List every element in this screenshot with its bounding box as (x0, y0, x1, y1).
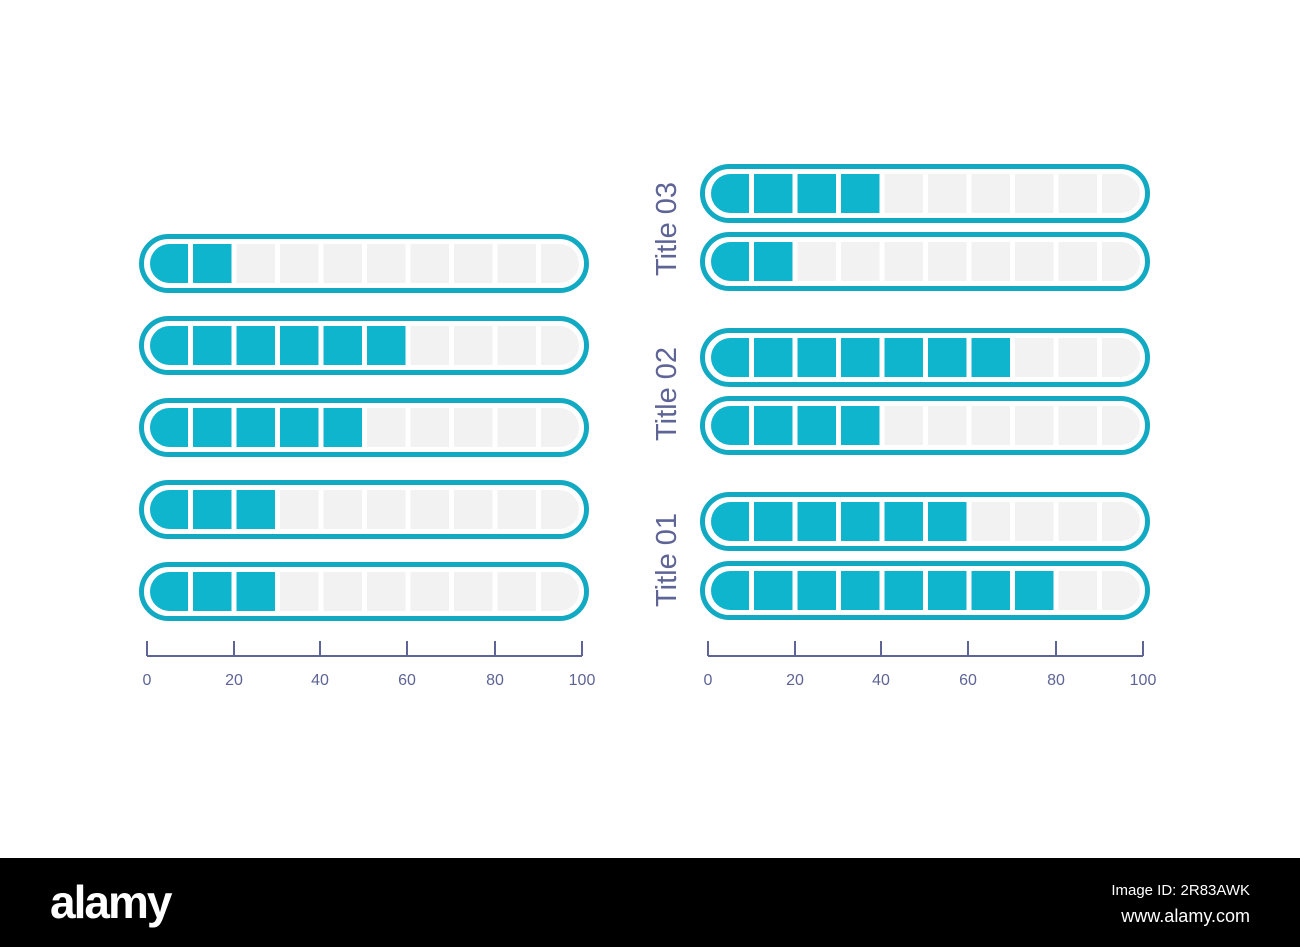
right bar chart (702, 166, 1148, 618)
left axis: 0 (143, 672, 152, 689)
bar L2: 60 (142, 318, 586, 372)
bar L1: 20 (142, 236, 586, 290)
right axis: 40 (872, 672, 890, 689)
left axis: 80 (486, 672, 504, 689)
label: Title 03: Title 03 (651, 182, 683, 276)
left axis: 60 (398, 672, 416, 689)
left axis: 20 (225, 672, 243, 689)
logo: alamy: alamy (50, 876, 173, 928)
bar R3: 70 (702, 330, 1148, 384)
bar R2: 20 (702, 234, 1148, 288)
website: www.alamy.com (1120, 906, 1250, 926)
bar L4: 30 (142, 482, 586, 536)
left axis: 100 (569, 672, 595, 689)
bar R6: 80 (702, 564, 1148, 618)
left axis (143, 641, 595, 689)
footer banner (0, 858, 1300, 947)
bar L3: 50 (142, 400, 586, 454)
label: Title 01: Title 01 (651, 513, 683, 607)
bar R5: 60 (702, 494, 1148, 548)
right axis: 0 (704, 672, 713, 689)
right axis: 60 (959, 672, 977, 689)
title labels (651, 182, 683, 607)
right axis: 20 (786, 672, 804, 689)
bar L5: 30 (142, 564, 586, 618)
left bar chart (142, 236, 586, 618)
bar R4: 40 (702, 398, 1148, 452)
image id: Image ID: 2R83AWK (1111, 882, 1250, 899)
right axis: 100 (1130, 672, 1156, 689)
right axis (704, 641, 1156, 689)
right axis: 80 (1047, 672, 1065, 689)
label: Title 02: Title 02 (651, 347, 683, 441)
left axis: 40 (311, 672, 329, 689)
bar R1: 40 (702, 166, 1148, 220)
